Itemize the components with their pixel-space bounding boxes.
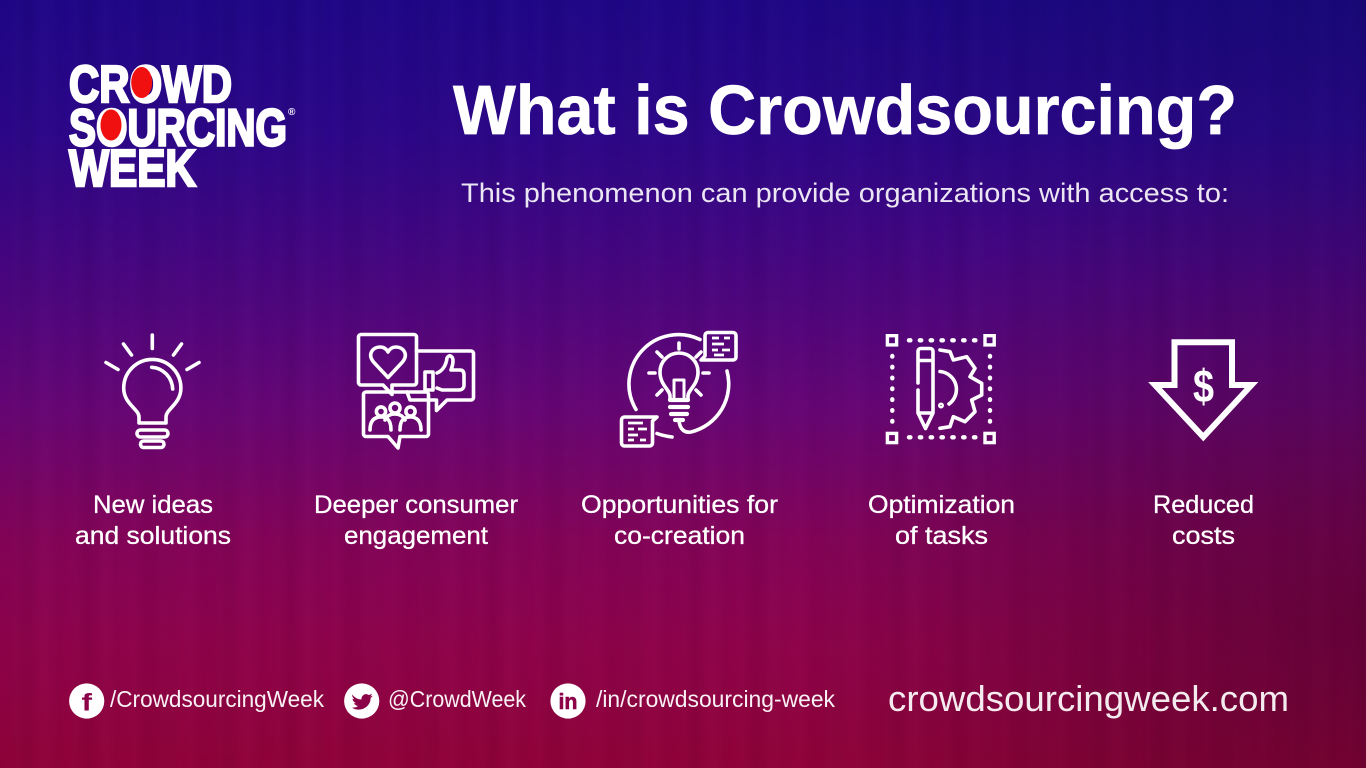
label: deeper consumer engagement — [314, 491, 518, 550]
label: optimization of tasks — [868, 491, 1015, 550]
label: deeper consumer engagement: engagement — [344, 522, 488, 550]
label: new ideas and solutions: New ideas — [93, 491, 213, 519]
twitter handle: @CrowdWeek — [388, 686, 526, 712]
pencil — [918, 348, 933, 428]
people bubble — [364, 392, 428, 448]
label: optimization of tasks: Optimization — [868, 491, 1015, 519]
icon: co-creation bulb and notes — [622, 332, 736, 446]
gear — [940, 350, 982, 428]
heart bubble — [358, 334, 416, 394]
icon: linkedin: in — [558, 689, 578, 714]
logo: Crowdsourcing Week: CROWD — [69, 56, 232, 114]
bulb — [660, 353, 698, 398]
heart — [371, 347, 405, 378]
icon: linkedin — [550, 683, 586, 719]
icon: dollar down arrow — [1155, 342, 1252, 437]
circle arcs — [629, 335, 729, 437]
website: crowdsourcingweek.com — [888, 678, 1289, 719]
logo: Crowdsourcing Week: WEEK — [69, 140, 196, 198]
logo: Crowdsourcing Week — [69, 56, 296, 198]
note bottom left — [622, 417, 657, 446]
logo: Crowdsourcing Week: SOURCING — [69, 100, 287, 158]
label: opportunities for co-creation: co-creation — [614, 522, 745, 550]
facebook handle: /CrowdsourcingWeek — [110, 686, 324, 712]
icon: facebook: f — [82, 690, 93, 716]
subtitle: This phenomenon can provide organizations with access to: — [461, 178, 1229, 208]
icon: pencil and gear in selection frame — [887, 336, 994, 443]
icon: dollar down arrow: $ — [1193, 360, 1214, 412]
icon: light bulb — [106, 335, 199, 448]
icon: social engagement bubbles — [358, 334, 474, 448]
logo: Crowdsourcing Week: ® — [288, 107, 296, 118]
label: reduced costs: Reduced — [1153, 491, 1254, 519]
icon: twitter — [344, 683, 379, 719]
label: reduced costs: costs — [1172, 522, 1235, 550]
people — [376, 407, 386, 416]
title: What is Crowdsourcing? — [453, 71, 1237, 149]
note top right — [701, 332, 736, 360]
label: opportunities for co-creation — [581, 491, 778, 550]
label: opportunities for co-creation: Opportunities for — [581, 491, 778, 519]
label: reduced costs — [1153, 491, 1254, 550]
frame corners — [887, 336, 897, 345]
label: new ideas and solutions: and solutions — [75, 522, 231, 550]
linkedin handle: /in/crowdsourcing-week — [596, 686, 835, 712]
dotted frame — [909, 338, 976, 342]
icon: facebook — [69, 683, 104, 719]
rays — [649, 343, 709, 395]
label: optimization of tasks: of tasks — [895, 522, 988, 550]
thumb bubble — [407, 351, 474, 410]
label: new ideas and solutions — [75, 491, 231, 550]
label: deeper consumer engagement: Deeper consumer — [314, 491, 518, 519]
thumb — [425, 356, 464, 390]
